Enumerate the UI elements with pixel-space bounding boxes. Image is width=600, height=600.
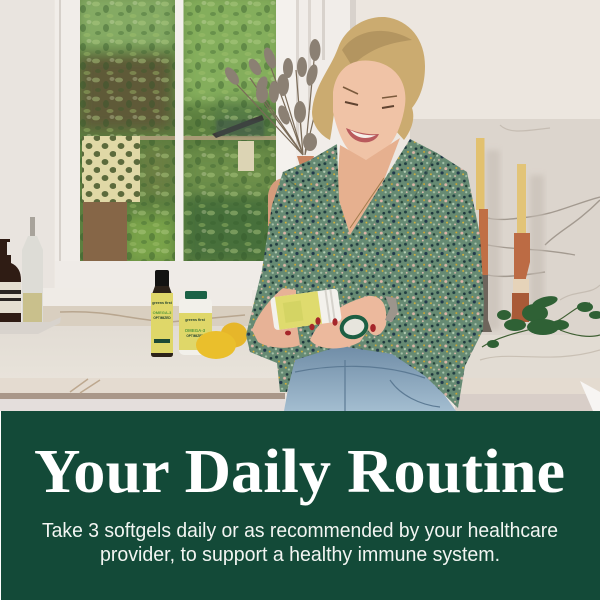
white omega-3 softgel bottle: OMEGA-3 (185, 328, 206, 333)
glass oil bottle (22, 217, 43, 325)
dark omega-3 bottle: OPTIMIZED (153, 316, 171, 320)
bottle lid (337, 312, 371, 342)
white omega-3 softgel bottle: greens first (185, 318, 206, 322)
body copy (42, 519, 558, 566)
roof and window muntin (55, 0, 276, 288)
blouse body (246, 139, 484, 408)
softgel bottle in hand (270, 288, 342, 330)
nail polish (285, 317, 376, 335)
body copy: Take 3 softgels daily or as recommended by your healthcare (42, 519, 558, 542)
candles (476, 138, 530, 332)
wall background (0, 0, 600, 411)
woman (246, 17, 484, 411)
smile (346, 128, 379, 142)
window sill (43, 288, 252, 328)
marble counter (0, 326, 600, 411)
eyes and brows (343, 87, 397, 98)
hands (252, 288, 300, 348)
far arm (268, 178, 285, 226)
dark omega-3 bottle: OMEGA-3 (153, 310, 172, 315)
jeans (284, 345, 456, 411)
headline: Your Daily Routine (34, 438, 565, 506)
soap bottle (0, 239, 21, 324)
window garden view (76, 0, 282, 265)
marble backsplash (410, 119, 600, 344)
hair (312, 17, 425, 140)
dark omega-3 bottle (151, 270, 173, 357)
tray (0, 317, 61, 334)
watch (385, 296, 398, 322)
lemons (196, 322, 248, 359)
garden fence (82, 136, 276, 261)
neck and chest (336, 138, 400, 235)
window frame (55, 0, 356, 290)
white omega-3 softgel bottle (179, 291, 212, 355)
face (333, 61, 405, 160)
green text panel (1, 411, 600, 600)
dark omega-3 bottle: greens first (152, 301, 173, 305)
dried stems in vase (222, 39, 328, 166)
trailing ivy plant (482, 294, 600, 348)
body copy: provider, to support a healthy immune system. (100, 543, 500, 566)
white omega-3 softgel bottle: OPTIMIZED (186, 334, 204, 338)
